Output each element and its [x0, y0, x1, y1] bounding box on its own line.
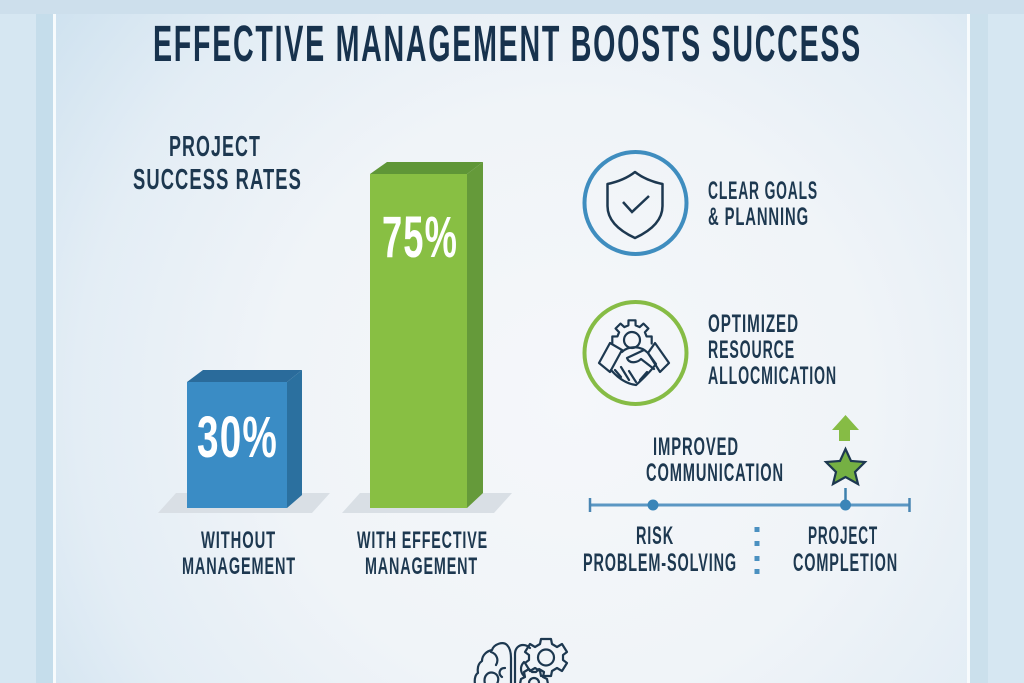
label: without management: [182, 527, 296, 580]
chart heading: PROJECT: [169, 131, 261, 163]
bar: with effective management 75%: 75%: [382, 205, 458, 270]
bar: with effective management 75%: [342, 162, 512, 513]
label: project completion: COMPLETION: [793, 549, 898, 577]
text: clear goals and planning: CLEAR GOALS: [708, 177, 818, 205]
icon: up arrow: [832, 415, 859, 441]
icon: shield in blue circle: [584, 152, 686, 254]
bar: without management 30%: [158, 370, 330, 513]
text: optimized resource allocation: [708, 310, 837, 390]
label: risk problem-solving: PROBLEM-SOLVING: [583, 549, 737, 577]
text: improved communication: COMMUNICATION: [646, 459, 784, 487]
label: without management: WITHOUT: [201, 527, 276, 554]
bar: without management 30%: 30%: [197, 405, 278, 470]
text: optimized resource allocation: OPTIMIZED: [708, 310, 799, 338]
text: clear goals and planning: [708, 177, 818, 231]
timeline: [590, 488, 910, 512]
label: project completion: [793, 522, 898, 577]
label: with effective management: WITH EFFECTIVE: [357, 527, 488, 554]
label: risk problem-solving: [583, 522, 737, 577]
label: with effective management: [357, 527, 488, 580]
icon: brain and gears: [475, 639, 567, 683]
text: optimized resource allocation: RESOURCE: [708, 336, 795, 364]
text: clear goals and planning: & PLANNING: [708, 203, 809, 231]
text: optimized resource allocation: ALLOCMICATION: [708, 362, 837, 390]
label: with effective management: MANAGEMENT: [365, 553, 478, 580]
icon: star: [826, 449, 865, 484]
chart heading: SUCCESS RATES: [133, 164, 302, 196]
text: improved communication: IMPROVED: [653, 433, 739, 461]
text: improved communication: [646, 433, 784, 487]
chart heading: [133, 131, 302, 196]
bar chart: [158, 162, 512, 580]
label: project completion: PROJECT: [808, 522, 878, 550]
dotted separator: [754, 527, 760, 574]
label: without management: MANAGEMENT: [182, 553, 296, 580]
label: risk problem-solving: RISK: [636, 522, 674, 550]
icon: gear and handshake in green circle: [584, 302, 686, 404]
